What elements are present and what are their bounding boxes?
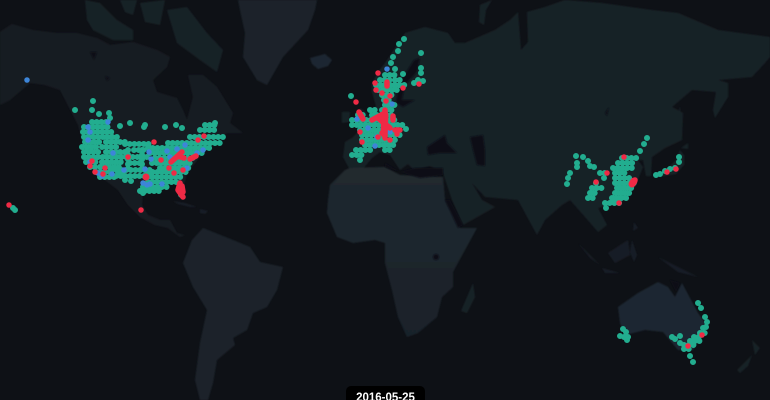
Africa [327,167,477,337]
Greenland [238,0,317,85]
Japan [656,157,679,175]
United States dense network [82,122,225,198]
date label [346,386,425,400]
data points: blue category [27,69,392,185]
Australia [684,333,706,349]
data points: red category [9,73,702,346]
North America [0,24,243,237]
South America [183,228,283,400]
Arctic islands [85,0,223,72]
scattered North American stations [75,101,215,193]
red stations [9,73,702,346]
Eurasia [343,0,770,235]
Iceland [310,54,332,69]
Novaya Zemlya [479,0,492,25]
seas and lakes [90,52,680,292]
New Zealand [737,355,752,373]
Australia [618,282,708,350]
data points: green category [13,39,707,362]
Japan and Sakhalin [655,150,684,177]
China [588,158,638,208]
Caribbean islands [173,201,197,207]
Europe [351,39,423,129]
Britain and Ireland [355,108,367,128]
Indonesia [578,222,698,277]
Madagascar [461,283,475,313]
Hawaii [13,208,15,210]
